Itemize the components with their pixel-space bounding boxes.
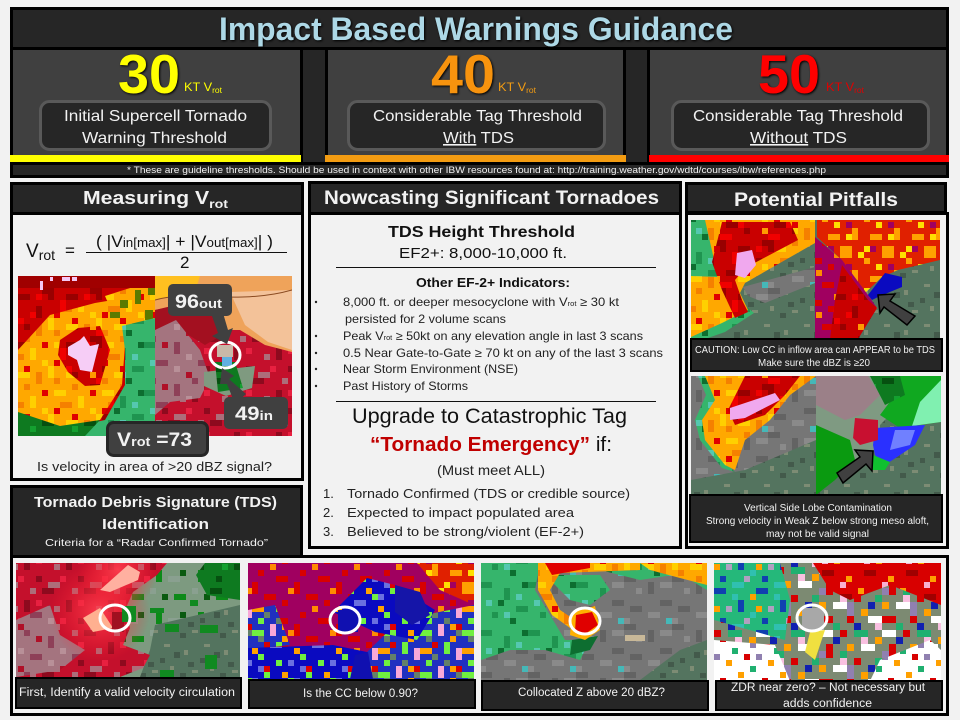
radar image: low cc reflectivity [691,220,815,339]
other indicators list: 0.5 Near Gate-to-Gate ≥ 70 kt on any of the last 3 scans [343,346,663,360]
panel: 40 kt threshold: rot [526,86,537,95]
tds height threshold: TDS Height Threshold [388,224,575,241]
catastrophic tag upgrade: 2. [323,505,334,520]
callout: 49 in: 49 in [235,404,273,425]
step 3: collocated reflectivity [481,563,708,710]
panel: 50 kt threshold: Considerable Tag Threshold [693,108,903,125]
step 4: differential reflectivity: adds confidence [783,698,872,710]
arrow: side lobe [837,450,873,483]
panel: 50 kt threshold: rot [854,86,865,95]
formula [26,232,287,272]
panel: tds identification heading: Tornado Debris Signature (TDS) [34,494,277,511]
catastrophic tag upgrade: (Must meet ALL) [437,462,545,478]
catastrophic tag upgrade: Believed to be strong/violent (EF-2+) [347,524,584,539]
panel: top header and thresholds [10,7,949,178]
velocity circle [210,342,240,368]
panel: 30 kt threshold: rot [212,86,223,95]
callout: 49 in [224,397,288,429]
other indicators list: Past History of Storms [343,379,468,393]
panel: tds identification heading [10,485,303,555]
panel: 50 kt threshold: Without TDS [750,130,847,147]
callout: vrot 73: Vrot =73 [117,430,192,451]
panel: potential pitfalls [685,182,949,549]
divider column [626,50,647,162]
heading: Nowcasting Significant Tornadoes [324,188,659,209]
footnote: * These are guideline thresholds. Should be used in context with other IBW resources found at: http://training.weather.gov/wdtd/courses/ibw/references.php [127,165,826,176]
panel: 30 kt threshold [10,43,301,162]
catastrophic tag upgrade: 1. [323,486,334,501]
step 1: velocity circulation: First, Identify a valid velocity circulation [19,687,235,699]
heading: measuring vrot: Measuring V [83,188,190,208]
other indicators list: Near Storm Environment (NSE) [343,362,518,376]
step 4: differential reflectivity [714,563,942,710]
step 4: differential reflectivity: ZDR near zero? – Not necessary but [731,682,926,694]
caption: side lobe [690,495,942,542]
panel: 50 kt threshold: 50 [758,43,820,105]
radar image: low cc correlation [815,220,940,339]
panel: tds identification heading: Criteria for a “Radar Confirmed Tornado” [45,537,269,549]
panel: 30 kt threshold: Initial Supercell Tornado [64,108,247,125]
callout: vrot 73 [108,422,208,456]
radar image: side lobe reflectivity [691,376,816,495]
panel: 40 kt threshold [325,43,626,162]
panel: 40 kt threshold: 40 [431,43,495,105]
catastrophic tag upgrade: Expected to impact populated area [347,505,575,520]
heading: measuring vrot: rot [209,197,228,211]
formula: = [65,241,75,260]
panel: 50 kt threshold [649,43,949,162]
formula: V [26,241,39,262]
formula: 2 [180,253,189,272]
panel: 50 kt threshold: KT V [826,80,852,94]
other indicators list: Other EF-2+ Indicators: [416,276,570,290]
caption: side lobe: Vertical Side Lobe Contamination [744,503,892,514]
panel: 40 kt threshold: With TDS [443,130,514,147]
catastrophic tag upgrade: 3. [323,524,334,539]
tds height threshold [388,224,575,262]
caption: side lobe: Strong velocity in Weak Z below strong meso aloft, [706,516,929,527]
catastrophic tag upgrade: Tornado Confirmed (TDS or credible source) [347,486,630,501]
arrow: low cc [878,294,915,325]
step 2: correlation coefficient [248,563,475,708]
velocity question: Is velocity in area of >20 dBZ signal? [37,459,272,474]
footnote [13,165,946,176]
other indicators list: 8,000 ft. or deeper mesocyclone with V rot ≥ 30 kt [343,295,620,309]
radar image: reflectivity [18,276,155,436]
caption: caution: CAUTION: Low CC in inflow area can APPEAR to be TDS [695,345,935,356]
panel: tds identification heading: Identification [102,516,209,533]
panel: nowcasting significant tornadoes [308,181,682,549]
radar image: velocity [155,276,292,436]
panel: tds criteria images [12,556,948,714]
formula: ( |Vin[max]| + |Vout[max]| ) [96,232,273,251]
caption: side lobe: may not be valid signal [766,529,869,540]
title: Impact Based Warnings Guidance [219,11,733,47]
catastrophic tag upgrade: “Tornado Emergency” if: [370,434,612,456]
step 2: correlation coefficient: Is the CC below 0.90? [303,688,418,700]
panel: 30 kt threshold: Warning Threshold [82,130,227,147]
tds height threshold: EF2+: 8,000-10,000 ft. [399,245,567,262]
caption: caution: Make sure the dBZ is ≥20 [758,358,870,369]
other indicators list: persisted for 2 volume scans [345,312,506,326]
panel: measuring vrot [10,182,304,481]
divider column [303,50,325,162]
step 1: velocity circulation [16,563,241,708]
other indicators list [315,276,663,393]
panel: 30 kt threshold: KT V [184,80,210,94]
catastrophic tag upgrade [323,405,630,539]
formula: rot [39,247,55,263]
arrow: to outbound [212,313,233,344]
title band [13,10,946,47]
callout: 96 out: 96out [175,292,223,313]
arrow: to inbound [220,368,246,404]
step 3: collocated reflectivity: Collocated Z above 20 dBZ? [518,687,665,699]
callout: 96 out [168,284,232,316]
heading: Potential Pitfalls [734,190,898,211]
panel: 30 kt threshold: 30 [118,43,180,105]
panel: 40 kt threshold: KT V [498,80,524,94]
catastrophic tag upgrade: Upgrade to Catastrophic Tag [352,405,627,428]
radar image: side lobe velocity [816,376,941,495]
caption: caution [691,339,942,371]
other indicators list: Peak V rot ≥ 50kt on any elevation angle in last 3 scans [343,329,643,343]
panel: 40 kt threshold: Considerable Tag Threshold [373,108,582,125]
